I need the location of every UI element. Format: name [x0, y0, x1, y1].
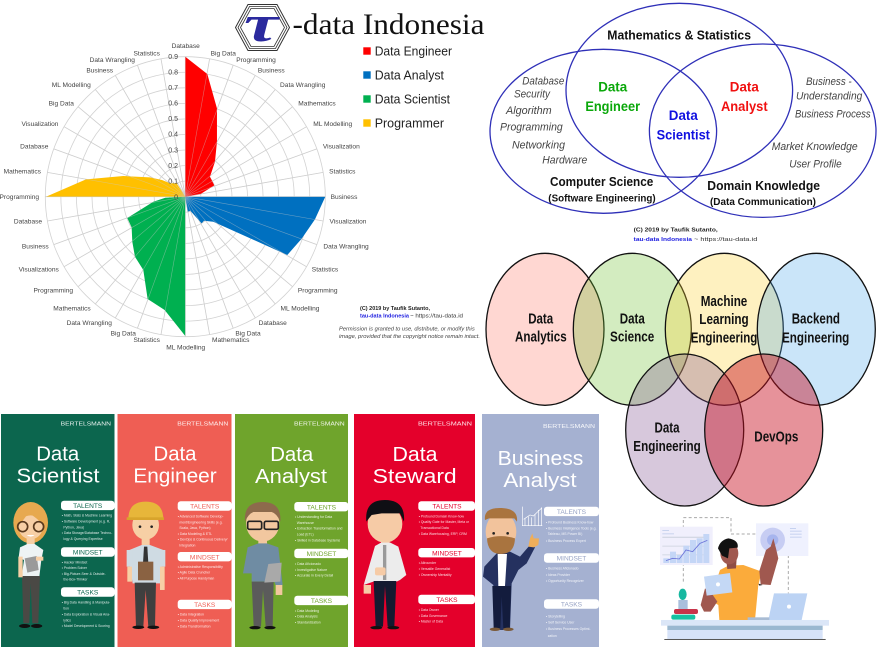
poster section pills [544, 507, 599, 609]
venn ellipses [490, 3, 876, 217]
machine learning engineering label [691, 293, 757, 346]
data science label [610, 310, 654, 346]
poster bullet text: Integration [179, 544, 196, 548]
poster section names [73, 503, 103, 597]
domain topics: Understanding [796, 90, 863, 102]
poster bullet text: • Understanding for Data [295, 515, 332, 519]
radar category labels: Big Data [235, 331, 261, 338]
copyright note under legend [339, 306, 480, 340]
poster bullet text: tion [63, 606, 69, 610]
poster title: Data [154, 443, 197, 466]
poster section names: MINDSET [73, 550, 103, 557]
poster bullet text: • Data Exploration & Visual Ana- [62, 612, 110, 616]
poster bullet text: • All Purpose Handyman [178, 577, 214, 581]
poster section names: MINDSET [432, 550, 462, 557]
domain topics: Business - [806, 76, 852, 88]
poster bullet text: logy & Querying Expertise [63, 537, 103, 541]
poster title [498, 447, 583, 492]
poster section names: MINDSET [557, 556, 586, 563]
poster bullet text: • Skilled in Database Systems [295, 539, 340, 543]
venn circles [486, 253, 875, 506]
poster bullet text: the-Box-Thinker [63, 578, 88, 582]
radar category labels: Big Data [49, 100, 74, 107]
poster section pills [61, 501, 114, 597]
computer science heading: Computer Science [550, 175, 653, 189]
character: man with glasses and tablet [243, 502, 283, 629]
poster bullet text: • Data Modeling & ETL [178, 532, 212, 536]
radar series wedges [46, 57, 325, 336]
radar category labels: Data Wrangling [323, 244, 369, 251]
poster section names [190, 504, 220, 609]
radar category labels: Data Wrangling [67, 320, 112, 327]
domain topics: Business Process [795, 108, 871, 120]
poster section names: TALENTS [73, 503, 103, 510]
desk [661, 620, 829, 640]
poster bullet text: • Agile Data Cruncher [178, 571, 211, 575]
radar category labels: Statistics [329, 169, 356, 176]
poster: business analyst: BERTELSMANN [543, 424, 595, 430]
poster title: Analyst [255, 465, 327, 488]
dashboard chart panel [660, 527, 713, 565]
radar category labels: Programming [236, 57, 276, 64]
poster bullet text: • Problem Solver [62, 566, 88, 570]
poster: data analyst: BERTELSMANN [294, 422, 345, 428]
poster: data steward [354, 414, 475, 647]
poster bullet text: • DevOps & Continuous Delivery/ [178, 538, 228, 542]
poster section names: TASKS [194, 602, 216, 609]
poster: data scientist: BERTELSMANN [61, 421, 111, 427]
radar category labels: Big Data [211, 50, 236, 57]
poster: data steward: BERTELSMANN [418, 422, 472, 428]
radar category labels: Business [22, 244, 49, 251]
radar category labels: Data Wrangling [90, 57, 135, 64]
poster bullet text: • Business Process Expert [546, 539, 586, 543]
poster bullet text: Warehouse [297, 521, 314, 525]
radial axis numbers: 0.7 [168, 85, 178, 92]
poster title [373, 443, 457, 488]
character: woman with glasses [13, 502, 48, 628]
computer science topics: Hardware [542, 155, 587, 167]
radar category labels: ML Modelling [281, 305, 320, 312]
poster title: Data [36, 443, 80, 466]
poster title: Data [270, 443, 314, 466]
poster bullet text [295, 515, 342, 625]
character: engineer with hard hat [127, 502, 165, 629]
poster bullet text: • Storytelling [546, 615, 565, 619]
poster bullet text: • Data Warehousing, ERP, CRM [419, 532, 467, 536]
backend engineering label: Engineering [782, 329, 849, 346]
poster section names [432, 504, 462, 604]
poster bullet text: • Standardization [295, 621, 321, 625]
data engineer label: Engineer [585, 98, 641, 114]
poster bullet text: • Investigative Nature [295, 568, 327, 572]
radar category labels: Database [172, 43, 200, 50]
poster bullet text: • Software Development (e.g. R, [62, 520, 110, 524]
copyright note under legend: image, provided that the copyright notice remain intact. [339, 334, 480, 340]
poster title: Business [498, 447, 583, 470]
spokes over wedges [45, 57, 325, 337]
radar category labels: Statistics [134, 50, 161, 57]
poster bullet text: • Data Aficionado [295, 562, 321, 566]
machine learning engineering label: Engineering [691, 329, 757, 346]
venn diagram: skills [490, 3, 876, 217]
poster bullet text: • Data Owner [419, 608, 440, 612]
poster: business analyst [482, 414, 829, 647]
poster bullet text: • Big Data Handling & Manipula- [62, 601, 110, 605]
radar category labels: Visualizations [19, 267, 59, 274]
poster bullet text: • Data Modeling [295, 609, 319, 613]
computer science topics: Programming [500, 122, 564, 134]
radial axis numbers: 0.5 [168, 116, 178, 123]
poster: data scientist [1, 414, 114, 647]
radial axis numbers: 0.1 [168, 178, 178, 185]
poster bullet text [419, 514, 470, 624]
poster section pills [418, 501, 475, 604]
legend [363, 44, 453, 130]
copyright note above second venn: tau-data Indonesia [634, 237, 692, 243]
radar category labels: Business [86, 68, 114, 75]
math heading: Mathematics & Statistics [607, 27, 751, 42]
radar category labels: Business [331, 194, 358, 201]
poster bullet text: ment/Engineering Skills (e.g. [179, 520, 223, 524]
data analyst label: Data [730, 79, 759, 95]
poster bullet text: • Data Storage/Database Techno- [62, 531, 112, 535]
data engineering label [633, 420, 701, 455]
radar category labels: Mathematics [4, 169, 42, 176]
poster bullet text: • Self Service User [546, 621, 575, 625]
data scientist label [657, 107, 710, 142]
backend engineering label [782, 310, 849, 346]
poster bullet text: • Profound Domain Know-how [419, 514, 465, 518]
poster bullet text: • Extraction Transformation and [295, 527, 342, 531]
logo: tau-data Indonesia [236, 0, 484, 53]
poster title [255, 443, 327, 488]
domain topics: Market Knowledge [772, 141, 858, 153]
poster bullet text: • Data Quality Improvement [178, 619, 219, 623]
radar category labels: Data Wrangling [280, 82, 326, 89]
poster bullet text: • Business Aficionado [546, 567, 579, 571]
radial axis numbers [168, 54, 178, 201]
poster bullet text: • Big-Picture-Seer & Outside- [62, 572, 106, 576]
poster bullet text: • Opportunity Recognizer [546, 579, 585, 583]
poster title: Scientist [16, 464, 100, 487]
computer science heading: (Software Engineering) [548, 192, 656, 204]
poster bullet text: • Math, Stats & Machine Learning [62, 514, 112, 518]
backend engineering label: Backend [792, 310, 840, 327]
copyright note under legend: ~ https://tau-data.id [410, 314, 463, 320]
poster title: Engineer [133, 464, 217, 487]
poster section names: TALENTS [307, 504, 337, 511]
radar category labels: Visualization [323, 144, 360, 151]
data engineering label: Engineering [633, 438, 701, 455]
radar category labels: Programming [0, 194, 39, 201]
poster section names [557, 509, 587, 609]
radar category labels: ML Modelling [166, 345, 206, 352]
radar category labels: ML Modelling [52, 82, 91, 89]
copyright note above second venn [634, 228, 757, 243]
poster section names: TALENTS [557, 509, 587, 516]
poster bullet text [546, 520, 597, 638]
poster title [16, 443, 100, 487]
domain topics: User Profile [789, 158, 842, 170]
character: bearded man pointing [483, 508, 539, 631]
poster bullet text: • Administrative Responsibility [178, 565, 223, 569]
poster section names: TASKS [436, 597, 458, 604]
radar category labels: Database [259, 320, 287, 327]
radial axis numbers: 0.6 [168, 101, 178, 108]
radar category labels: Big Data [111, 331, 136, 338]
poster bullet text: lytics [63, 618, 71, 622]
poster bullet text: • Data Transformation [178, 625, 211, 629]
poster section pills [294, 502, 348, 605]
poster section names: MINDSET [307, 551, 336, 558]
dashed connectors [683, 518, 788, 593]
radar grid [45, 57, 325, 337]
data engineering label: Data [654, 420, 680, 437]
radial axis numbers: 0.9 [168, 54, 178, 61]
touch target panel [756, 523, 808, 556]
character: man in white shirt [364, 500, 406, 629]
poster bullet text: • Advanced Software Develop- [178, 514, 224, 518]
person [701, 538, 778, 620]
poster bullet text: • Data Governance [419, 614, 448, 618]
radar category labels: Programming [34, 287, 73, 294]
poster section names: TALENTS [190, 504, 220, 511]
poster section names [307, 504, 337, 605]
machine learning engineering label: Machine [701, 293, 747, 310]
poster bullet text: • Allrounder [419, 561, 437, 565]
computer science topics: Networking [512, 139, 566, 151]
poster: data engineer [118, 414, 232, 647]
radial axis numbers: 0.3 [168, 147, 178, 154]
radar category labels [0, 43, 369, 352]
poster bullet text: Load (ETL) [297, 533, 314, 537]
radar category labels: Statistics [312, 267, 339, 274]
poster bullet text [178, 514, 228, 629]
poster bullet text: • Master of Data [419, 620, 443, 624]
machine learning engineering label: Learning [699, 311, 749, 328]
data scientist label: Data [669, 107, 698, 123]
copyright note under legend: tau-data Indonesia [360, 314, 409, 320]
data analyst label [721, 79, 768, 114]
logo: tau-data Indonesia: -data Indonesia [292, 8, 484, 41]
radar category labels: Mathematics [212, 337, 250, 344]
poster bullet text [62, 514, 112, 628]
radar category labels: ML Modelling [313, 121, 353, 128]
poster bullet text: Tableau, MS Power BI) [548, 532, 582, 536]
radar category labels: Mathematics [53, 305, 91, 312]
computer science topics [500, 75, 587, 167]
data analytics label: Data [528, 310, 554, 327]
domain knowledge heading: (Data Communication) [710, 196, 816, 208]
radar category labels: Statistics [134, 337, 161, 344]
poster bullet text: • Hacker Mindset [62, 560, 87, 564]
radar category labels: Visualization [330, 219, 367, 226]
data science label: Science [610, 329, 654, 346]
radar chart [0, 43, 369, 352]
poster bullet text: • Quality Gate for Master, Meta or [419, 520, 470, 524]
poster bullet text: • Accurate in Every Detail [295, 574, 333, 578]
poster title: Data [392, 443, 438, 466]
poster bullet text: • Business Intelligence Tools (e.g. [546, 526, 597, 530]
radar category labels: Database [14, 219, 42, 226]
radar category labels: Business [258, 68, 285, 75]
legend: Data Engineer [375, 44, 453, 58]
poster bullet text: • Ideas Provider [546, 573, 571, 577]
poster bullet text: Scala, Java, Python) [179, 526, 211, 530]
poster bullet text: • Ownership Mentality [419, 573, 452, 577]
poster section names: MINDSET [190, 554, 220, 561]
poster bullet text: • Data Analysis [295, 615, 318, 619]
poster bullet text: • Versatile Generalist [419, 567, 450, 571]
poster section pills [178, 501, 232, 609]
legend: Programmer [375, 116, 445, 130]
computer science heading [548, 175, 656, 204]
computer science topics: Algorithm [505, 105, 552, 117]
poster bullet text: Python, Java) [63, 525, 84, 529]
radial axis numbers: 0.4 [168, 132, 178, 139]
poster: data analyst [235, 414, 348, 647]
poster: data engineer: BERTELSMANN [177, 421, 228, 427]
icon: mini growth chart [522, 507, 542, 526]
plant and books [671, 589, 698, 620]
poster bullet text: • Business Processes Optimi- [546, 627, 591, 631]
illustration: man with tablet and laptop at desk [660, 518, 829, 640]
data analytics label [515, 310, 567, 346]
poster bullet text: Transactional Data [420, 526, 449, 530]
data analytics label: Analytics [515, 329, 567, 346]
poster title: Analyst [503, 469, 577, 492]
data analyst label: Analyst [721, 98, 768, 114]
poster section names: TASKS [561, 602, 583, 609]
data engineer label: Data [598, 79, 627, 95]
legend: Data Analyst [375, 68, 444, 82]
devops label: DevOps [754, 429, 798, 446]
poster section names: TALENTS [432, 504, 462, 511]
radial axis numbers: 0.2 [168, 163, 178, 170]
radar category labels: Visualization [22, 121, 59, 128]
domain knowledge heading [707, 179, 820, 208]
radial axis numbers: 0.8 [168, 70, 178, 77]
domain knowledge heading: Domain Knowledge [707, 179, 820, 193]
radial axis numbers: 0 [174, 194, 178, 201]
poster section names: TASKS [77, 590, 99, 597]
radar category labels: Mathematics [298, 100, 336, 107]
poster title [133, 443, 217, 487]
computer science topics: Security [514, 89, 551, 101]
domain topics [772, 76, 871, 170]
copyright note above second venn: ~ https://tau-data.id [694, 237, 757, 243]
data scientist label: Scientist [657, 126, 710, 142]
poster bullet text: zation [548, 634, 557, 638]
laptop [748, 593, 807, 620]
poster bullet text: • Data Integration [178, 613, 204, 617]
poster bullet text: • Profound Business Know-how [546, 520, 594, 524]
poster title: Steward [373, 465, 457, 488]
data science label: Data [620, 310, 645, 327]
copyright note under legend: Permission is granted to use, distribute, or modify this [339, 327, 475, 333]
poster section names: TASKS [311, 598, 333, 605]
venn diagram: engineering disciplines [486, 253, 875, 506]
poster bullet text: • Model Development & Scoring [62, 624, 110, 628]
legend: Data Scientist [375, 92, 450, 106]
radar category labels: Database [20, 144, 49, 151]
copyright note under legend: (C) 2019 by Taufik Sutanto, [360, 306, 431, 312]
copyright note above second venn: (C) 2019 by Taufik Sutanto, [634, 228, 718, 234]
data engineer label [585, 79, 641, 114]
computer science topics: Database [522, 75, 564, 87]
radar category labels: Programming [298, 287, 338, 294]
